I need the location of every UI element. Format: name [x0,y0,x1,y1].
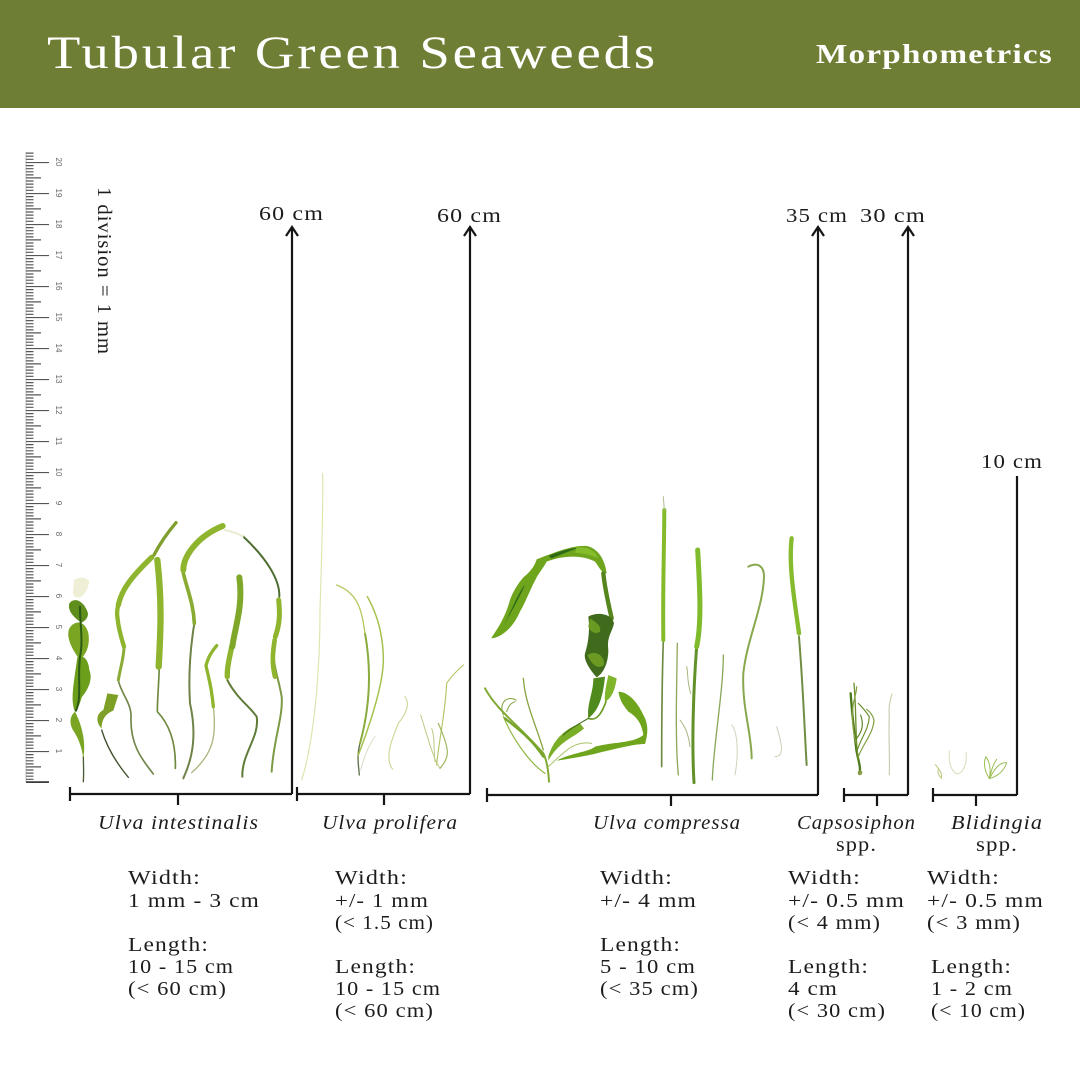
measurements: (< 30 cm) [788,1000,886,1022]
measurements: +/- 0.5 mm [927,890,1044,912]
measurements: Length: [600,934,681,956]
ruler: 9 [54,501,63,506]
ruler: 20 [54,158,63,167]
measurements: +/- 0.5 mm [788,890,905,912]
measurements [927,867,1044,1022]
measurements: (< 10 cm) [931,1000,1026,1022]
bracket [487,788,818,806]
measurements: Length: [788,956,869,978]
ruler: 10 [54,468,63,477]
bracket [70,787,292,805]
measurements: (< 3 mm) [927,912,1021,934]
measurements: Width: [788,867,861,889]
ruler: 19 [54,189,63,198]
ruler: 18 [54,220,63,229]
species name: Ulva intestinalis [98,812,259,834]
measurements [600,867,699,1000]
panel: Capsosiphon spp. [788,205,926,1022]
panel: Blidingia spp. [927,451,1044,1022]
ruler: 12 [54,406,63,415]
ruler: 4 [54,656,63,661]
measurements: 1 - 2 cm [931,978,1013,1000]
measurements [128,867,260,1000]
species name: spp. [976,834,1018,856]
seaweed specimens: Ulva intestinalis [68,523,282,782]
panel: Ulva compressa [485,205,848,1000]
measurements: 10 - 15 cm [128,956,234,978]
species name [797,812,916,856]
measurements: 4 cm [788,978,838,1000]
measurements [788,867,905,1022]
header banner [0,0,1080,108]
measurements: (< 60 cm) [128,978,227,1000]
measurements: Width: [927,867,1000,889]
length label: 35 cm [786,205,848,227]
measurements: 5 - 10 cm [600,956,696,978]
species name [951,812,1043,856]
length arrow: 60 cm [464,227,476,794]
ruler: 5 [54,625,63,630]
length arrow: 35 cm [812,227,824,795]
measurements: 10 - 15 cm [335,978,441,1000]
length arrow: 30 cm [902,227,914,795]
ruler: 8 [54,532,63,537]
ruler: 7 [54,563,63,568]
species name: Capsosiphon [797,812,916,834]
seaweed specimens: Ulva prolifera [302,473,463,780]
bracket [933,788,1017,806]
title: Tubular Green Seaweeds [47,27,658,79]
seaweed specimens: Blidingia [935,751,1007,779]
ruler: 6 [54,594,63,599]
species name: Ulva compressa [593,812,741,834]
ruler: 11 [54,437,63,446]
length label: 30 cm [860,205,926,227]
length label: 60 cm [259,203,324,225]
measurements: +/- 4 mm [600,890,697,912]
length label: 60 cm [437,205,502,227]
bracket [297,787,470,805]
length arrow: 60 cm [286,227,298,794]
species name: spp. [836,834,877,856]
seaweed specimens: Capsosiphon [851,683,892,775]
subtitle: Morphometrics [816,39,1053,69]
species name: Blidingia [951,812,1043,834]
bracket [844,788,908,806]
ruler: 15 [54,313,63,322]
measurements: Width: [128,867,201,889]
measurements [335,867,441,1022]
ruler scale note: 1 division = 1 mm [93,187,115,355]
length label: 10 cm [981,451,1043,473]
measurements: +/- 1 mm [335,890,429,912]
ruler: 13 [54,375,63,384]
measurements: (< 4 mm) [788,912,881,934]
measurements: (< 35 cm) [600,978,699,1000]
seaweed specimens: Ulva compressa [485,497,807,783]
species name: Ulva prolifera [322,812,458,834]
measurements: (< 60 cm) [335,1000,434,1022]
ruler: 16 [54,282,63,291]
measurements: Length: [335,956,416,978]
measurements: 1 mm - 3 cm [128,890,260,912]
measurements: Length: [128,934,209,956]
ruler: 17 [54,251,63,260]
panel: Ulva prolifera [297,205,502,1022]
measurements: Width: [600,867,673,889]
panel: Ulva intestinalis [68,203,324,1000]
length line: 10 cm [1016,476,1018,795]
ruler [26,152,63,783]
ruler: 2 [54,718,63,723]
measurements: Width: [335,867,408,889]
ruler: 14 [54,344,63,353]
measurements: Length: [931,956,1012,978]
ruler: 3 [54,687,63,692]
measurements: (< 1.5 cm) [335,912,434,934]
ruler: 1 [54,749,63,754]
